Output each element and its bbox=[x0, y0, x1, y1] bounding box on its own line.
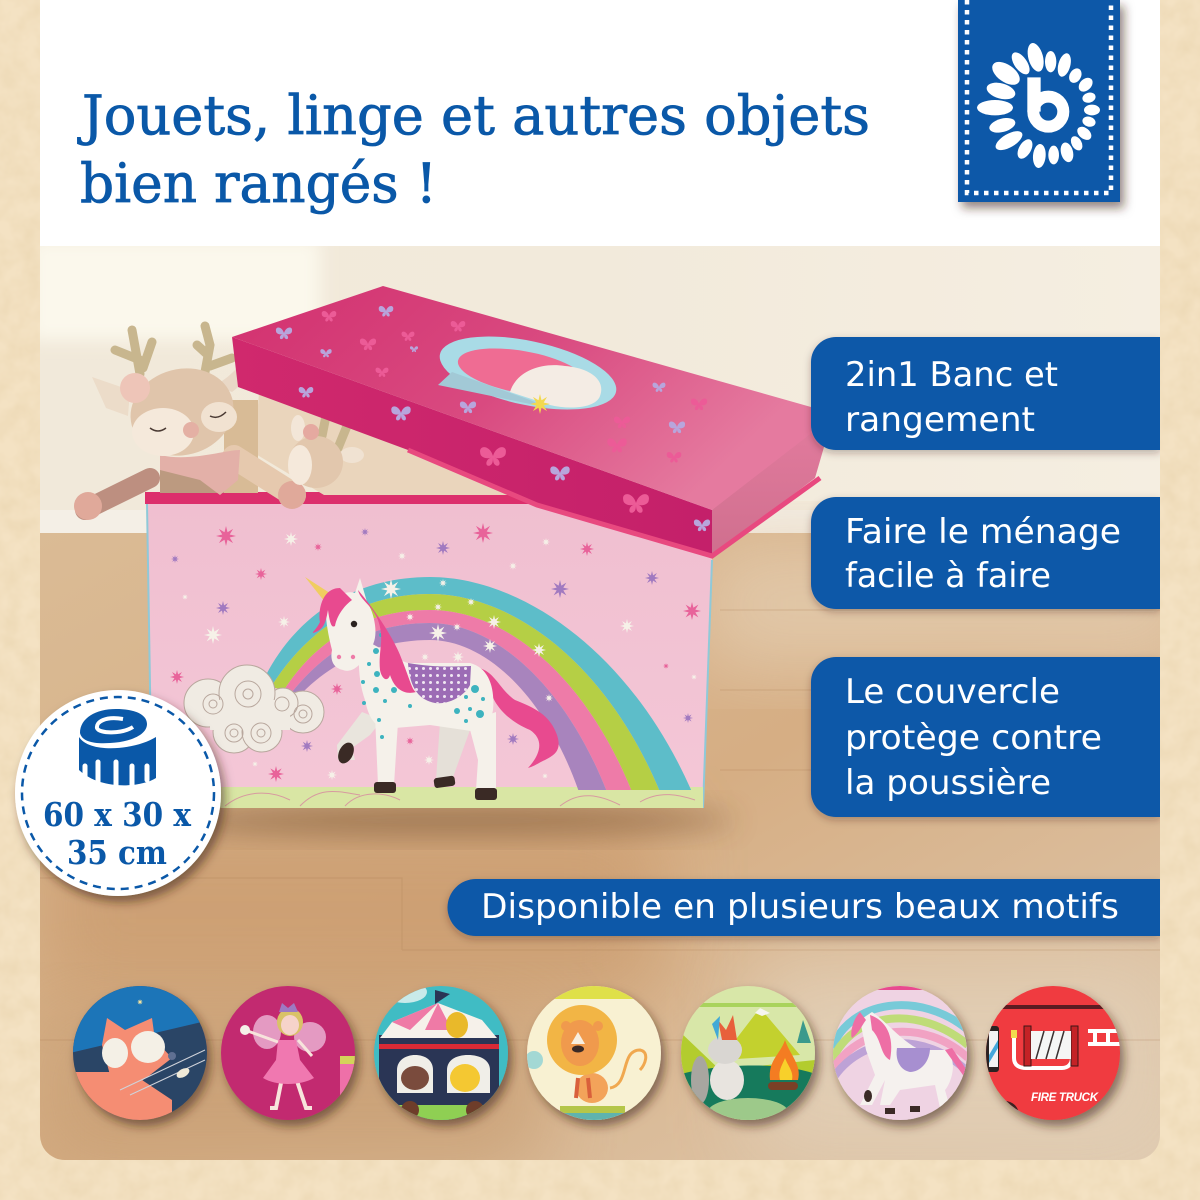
feature callout: easy tidying: facile à faire bbox=[845, 556, 1051, 596]
motifs banner bbox=[448, 879, 1160, 936]
unicorn saddle bbox=[408, 663, 471, 703]
feature callout: dust protection: protège contre bbox=[845, 718, 1102, 758]
unicorn tail bbox=[479, 668, 559, 768]
storage box bbox=[145, 492, 712, 808]
motif: fox bbox=[70, 985, 210, 1125]
lid unicorn emblem bbox=[438, 336, 616, 414]
fabric bbox=[254, 393, 508, 495]
lid bbox=[232, 286, 824, 556]
rainbow bbox=[266, 577, 692, 792]
wooden floor bbox=[40, 533, 1200, 1170]
small deer bbox=[288, 415, 364, 488]
lid right side bbox=[712, 432, 824, 553]
box rim bbox=[145, 492, 540, 504]
stars pattern bbox=[170, 523, 701, 782]
title: Jouets, linge et autres objets bbox=[77, 84, 870, 147]
box shadow bbox=[165, 805, 735, 835]
motif: unicorn bbox=[830, 985, 970, 1125]
dimensions text: 35 cm bbox=[67, 833, 167, 872]
grass strip bbox=[220, 787, 703, 808]
motif: fire truck: FIRE TRUCK bbox=[1031, 1092, 1099, 1104]
dimensions text bbox=[43, 795, 191, 872]
brand logo tag bbox=[958, 0, 1120, 202]
plush deer and fabric bbox=[74, 326, 508, 520]
lid butterflies bbox=[276, 306, 710, 531]
unicorn head bbox=[326, 592, 375, 671]
dimensions text: 60 x 30 x bbox=[43, 795, 191, 834]
header panel bbox=[40, 0, 1160, 246]
motif: fire truck bbox=[983, 985, 1123, 1129]
motifs banner: Disponible en plusieurs beaux motifs bbox=[481, 887, 1119, 927]
title bbox=[77, 84, 870, 215]
box front bbox=[147, 503, 712, 808]
feature callout: dust protection: Le couvercle bbox=[845, 672, 1060, 712]
motif: circus train bbox=[370, 981, 515, 1125]
feature callout: bench and storage: 2in1 Banc et bbox=[845, 355, 1058, 395]
unicorn bbox=[305, 577, 559, 800]
lid front bbox=[232, 337, 712, 554]
motif: raccoon campfire bbox=[678, 985, 818, 1126]
large deer bbox=[74, 326, 306, 520]
feature callout: bench and storage: rangement bbox=[845, 400, 1035, 440]
lid top bbox=[232, 286, 818, 510]
logo flower bbox=[977, 41, 1100, 168]
wall bbox=[40, 246, 1160, 536]
motif: lion bbox=[525, 985, 665, 1125]
feature callout: easy tidying: Faire le ménage bbox=[845, 512, 1121, 552]
cloud bbox=[184, 665, 324, 753]
icon: measuring tape bbox=[79, 709, 156, 788]
product photo bbox=[30, 240, 1200, 1170]
feature callout: bench and storage bbox=[811, 337, 1160, 450]
title: bien rangés ! bbox=[80, 152, 437, 215]
feature callout: dust protection: la poussière bbox=[845, 763, 1051, 803]
feature callout: easy tidying bbox=[811, 497, 1160, 609]
size badge bbox=[15, 690, 221, 896]
feature callout: dust protection bbox=[811, 657, 1160, 817]
motif: princess bbox=[218, 985, 358, 1125]
